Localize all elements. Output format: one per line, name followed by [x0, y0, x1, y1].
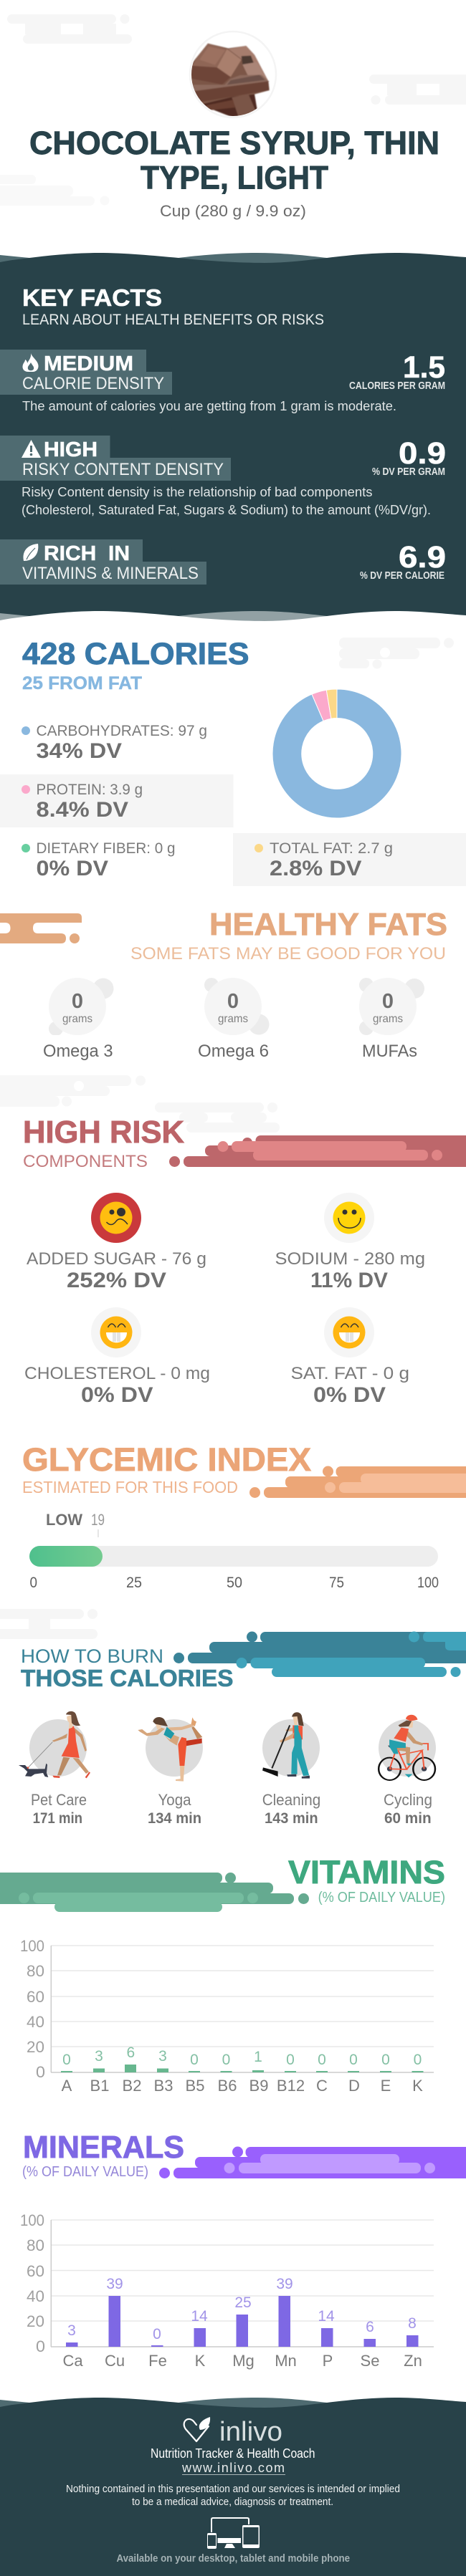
fact: risky content density — [0, 436, 446, 517]
legend: carbohydrates: 34% DV — [36, 739, 122, 763]
website link: www.inlivo.com — [181, 2461, 285, 2475]
activity: cycling: Cycling — [384, 1791, 432, 1809]
minerals heading — [22, 2130, 184, 2180]
gauge scale: 100 — [417, 1575, 439, 1591]
icon: woman sweeping — [262, 1712, 310, 1779]
legend: carbohydrates: CARBOHYDRATES: 97 g — [36, 723, 207, 739]
panel: vitamins — [0, 1854, 445, 2095]
panel: glycemic index — [22, 1441, 466, 1591]
panel: key facts — [0, 253, 466, 645]
bar chart: vitamins: B12 — [277, 2077, 305, 2095]
calories heading: 25 FROM FAT — [22, 673, 142, 693]
key facts heading — [22, 284, 324, 328]
legend: dietary fiber — [22, 840, 175, 880]
bar chart: vitamins: B9 — [249, 2077, 268, 2095]
icon: smiling face — [324, 1193, 374, 1243]
decorative band — [159, 2146, 466, 2178]
bar chart: vitamins: 0 — [381, 2052, 390, 2068]
risk: added sugar: 252% DV — [67, 1269, 166, 1292]
glycemic index heading — [22, 1441, 311, 1496]
high risk heading: HIGH RISK — [23, 1115, 184, 1150]
bar chart: minerals: Se — [361, 2352, 379, 2370]
high risk heading — [23, 1115, 184, 1171]
gauge scale — [30, 1575, 439, 1591]
panel: how to burn those calories — [0, 1609, 466, 1827]
legend: protein: PROTEIN: 3.9 g — [36, 782, 143, 798]
omega 3: Omega 3 — [43, 1042, 113, 1061]
fact: calorie density: MEDIUM — [44, 352, 133, 375]
healthy fats heading: HEALTHY FATS — [209, 907, 447, 942]
fact: risky content density: % DV PER GRAM — [372, 466, 445, 478]
risk: cholesterol: CHOLESTEROL - 0 mg — [24, 1364, 210, 1383]
legend: dietary fiber: 0% DV — [36, 857, 108, 880]
activity: yoga: 134 min — [148, 1810, 201, 1827]
bar chart: vitamins: 0 — [36, 2063, 45, 2081]
bar chart: vitamins: B2 — [123, 2077, 141, 2095]
bar chart: minerals: 25 — [234, 2294, 252, 2311]
panel: minerals — [20, 2130, 466, 2370]
bar chart: minerals: 6 — [366, 2319, 374, 2335]
activity: yoga: Yoga — [158, 1791, 191, 1809]
activity: pet care — [19, 1711, 90, 1827]
fact: risky content density: RISKY CONTENT DENSITY — [22, 460, 224, 479]
bar chart: vitamins: B6 — [218, 2077, 237, 2095]
bar chart: minerals: 14 — [318, 2308, 335, 2325]
bar chart: vitamins: 0 — [62, 2052, 71, 2068]
decorative band — [249, 1466, 466, 1498]
activity: cleaning: Cleaning — [262, 1791, 320, 1809]
fact: vitamins and minerals — [0, 539, 446, 585]
icon: leaf — [23, 544, 38, 561]
fact: risky content density: (Cholesterol, Saturated Fat, Sugars & Sodium) to the amount (%DV/gr). — [22, 503, 431, 517]
decorative band — [0, 1873, 309, 1912]
bar chart: vitamins: 40 — [27, 2013, 44, 2031]
bar chart: vitamins: D — [348, 2077, 360, 2095]
serving size: Cup (280 g / 9.9 oz) — [160, 202, 306, 220]
high risk heading: COMPONENTS — [23, 1152, 148, 1171]
donut chart — [272, 689, 401, 818]
gauge label: LOW — [46, 1511, 82, 1529]
bar chart: minerals: Cu — [105, 2352, 125, 2370]
bar chart: minerals: 0 — [153, 2326, 161, 2342]
bar chart: vitamins: 60 — [27, 1988, 44, 2006]
disclaimer: to be a medical advice, diagnosis or treatment. — [132, 2496, 333, 2508]
gauge scale: 50 — [227, 1575, 242, 1591]
panel: high risk — [0, 1075, 466, 1407]
calories heading: 428 CALORIES — [22, 637, 249, 671]
legend: dietary fiber: DIETARY FIBER: 0 g — [36, 840, 175, 857]
fact: calorie density — [0, 350, 445, 413]
vitamins heading: (% OF DAILY VALUE) — [318, 1890, 445, 1905]
bar chart: vitamins: C — [316, 2077, 328, 2095]
bar chart: minerals: 39 — [106, 2276, 123, 2292]
omega 3 — [43, 978, 113, 1061]
bar chart: vitamins: 6 — [127, 2044, 135, 2061]
disclaimer — [66, 2483, 400, 2508]
activity: cycling — [379, 1715, 436, 1827]
risk: added sugar — [27, 1193, 206, 1292]
legend: total fat: TOTAL FAT: 2.7 g — [270, 840, 393, 857]
gauge scale: 25 — [126, 1575, 142, 1591]
bar chart: vitamins: E — [381, 2077, 391, 2095]
food image: chocolate — [190, 32, 276, 120]
bar chart: minerals: Mn — [275, 2352, 297, 2370]
burn heading: HOW TO BURN — [21, 1645, 163, 1667]
fact: vitamins and minerals: 6.9 — [399, 540, 446, 575]
omega 3: 0 — [72, 990, 83, 1013]
fact: risky content density: Risky Content density is the relationship of bad components — [22, 485, 373, 499]
vitamins heading: VITAMINS — [288, 1854, 445, 1890]
risk: sodium: 11% DV — [310, 1269, 388, 1292]
bar chart: minerals: 14 — [191, 2308, 208, 2325]
risk: sodium — [275, 1193, 425, 1292]
bar chart: minerals: Ca — [62, 2352, 83, 2370]
activity: pet care: Pet Care — [31, 1791, 87, 1809]
activity: cycling: 60 min — [384, 1810, 432, 1827]
risk: cholesterol — [24, 1307, 210, 1407]
legend: total fat: 2.8% DV — [270, 857, 361, 880]
bar chart: minerals: 60 — [27, 2262, 44, 2280]
icon: grinning face — [324, 1307, 374, 1357]
risk: cholesterol: 0% DV — [81, 1383, 153, 1407]
legend: total fat — [255, 840, 393, 880]
bar chart: minerals: P — [323, 2352, 333, 2370]
decorative band — [0, 913, 82, 943]
bar chart: vitamins: 0 — [286, 2052, 295, 2068]
gauge scale: 0 — [30, 1575, 37, 1591]
mufas: grams — [373, 1013, 403, 1025]
fact: calorie density: CALORIE DENSITY — [22, 374, 164, 393]
minerals heading: MINERALS — [23, 2130, 184, 2165]
healthy fats heading — [130, 907, 447, 963]
legend: protein — [22, 782, 143, 822]
vitamins heading — [288, 1854, 445, 1905]
risk: saturated fat — [291, 1307, 409, 1407]
bar chart: vitamins: 0 — [349, 2052, 358, 2068]
bar chart: minerals: Zn — [404, 2352, 422, 2370]
bar chart: vitamins: K — [412, 2077, 423, 2095]
bar chart: minerals: 20 — [27, 2312, 44, 2330]
minerals heading: (% OF DAILY VALUE) — [22, 2164, 148, 2180]
bar chart: minerals: 40 — [27, 2287, 44, 2305]
key facts heading: LEARN ABOUT HEALTH BENEFITS OR RISKS — [22, 312, 324, 328]
fact: vitamins and minerals: VITAMINS & MINERALS — [22, 564, 199, 583]
omega 6: Omega 6 — [198, 1042, 269, 1061]
bar chart: vitamins: 20 — [27, 2038, 44, 2056]
bar chart: vitamins: 3 — [158, 2048, 167, 2065]
gauge label — [46, 1511, 105, 1537]
glycemic index heading: ESTIMATED FOR THIS FOOD — [22, 1478, 238, 1496]
activity: pet care: 171 min — [33, 1810, 82, 1827]
fact: vitamins and minerals: % DV PER CALORIE — [360, 570, 444, 582]
omega 3: grams — [62, 1013, 92, 1025]
bar chart: minerals: 80 — [27, 2236, 44, 2254]
fact: risky content density: HIGH — [44, 438, 98, 461]
fact: calorie density: The amount of calories you are getting from 1 gram is moderate. — [22, 399, 396, 413]
fact: calorie density: CALORIES PER GRAM — [349, 380, 445, 392]
omega 6 — [198, 978, 270, 1061]
mufas: 0 — [382, 990, 394, 1013]
bar chart: minerals: K — [195, 2352, 206, 2370]
title — [29, 125, 439, 196]
burn heading — [21, 1645, 234, 1691]
icon: woman cycling — [379, 1715, 435, 1780]
gray row backgrounds — [0, 774, 466, 886]
legend: carbohydrates — [22, 723, 207, 763]
bar chart: vitamins: B1 — [90, 2077, 109, 2095]
key facts heading: KEY FACTS — [22, 284, 162, 311]
activity: yoga — [138, 1717, 203, 1827]
panel: healthy fats — [0, 907, 447, 1061]
legend: protein: 8.4% DV — [36, 798, 128, 822]
logo: inlivo — [184, 2417, 282, 2447]
title: TYPE, LIGHT — [141, 159, 328, 196]
activity: cleaning: 143 min — [265, 1810, 318, 1827]
fact: vitamins and minerals: RICH IN — [44, 542, 130, 565]
fact: risky content density: 0.9 — [399, 436, 446, 471]
healthy fats heading: SOME FATS MAY BE GOOD FOR YOU — [130, 944, 446, 963]
activity: cleaning — [262, 1712, 320, 1827]
bar chart: vitamins: A — [62, 2077, 72, 2095]
disclaimer: Nothing contained in this presentation and our services is intended or implied — [66, 2483, 400, 2495]
header panel — [0, 14, 466, 220]
icon: woman in yoga pose — [138, 1717, 202, 1782]
mufas — [359, 978, 424, 1061]
bar chart: minerals — [20, 2211, 434, 2370]
bar chart: vitamins: 1 — [254, 2049, 262, 2065]
bar chart: minerals: Mg — [232, 2352, 255, 2370]
bar chart: vitamins: 0 — [222, 2052, 230, 2068]
icon: worried face — [91, 1193, 141, 1243]
bar chart: vitamins: 0 — [414, 2052, 422, 2068]
gauge bar — [29, 1546, 438, 1567]
icon: warning triangle — [22, 440, 41, 458]
tagline: Nutrition Tracker & Health Coach — [151, 2446, 315, 2461]
gauge scale: 75 — [329, 1575, 344, 1591]
bar chart: vitamins: B3 — [154, 2077, 173, 2095]
bar chart: minerals: 100 — [20, 2211, 44, 2229]
gauge label: 19 — [91, 1511, 105, 1529]
logo: inlivo: inlivo — [219, 2417, 282, 2447]
title: CHOCOLATE SYRUP, THIN — [29, 125, 439, 161]
bar chart: minerals: 39 — [276, 2276, 293, 2292]
omega 6: 0 — [227, 990, 239, 1013]
bar chart: vitamins: 0 — [190, 2052, 199, 2068]
decorative band — [173, 1632, 466, 1677]
glycemic index heading: GLYCEMIC INDEX — [22, 1441, 311, 1478]
availability note: Available on your desktop, tablet and mobile phone — [116, 2552, 350, 2565]
burn heading: THOSE CALORIES — [21, 1665, 234, 1691]
icon: grinning face — [91, 1307, 141, 1357]
risk: added sugar: ADDED SUGAR - 76 g — [27, 1249, 206, 1269]
bar chart: minerals: 8 — [408, 2315, 417, 2332]
bar chart: vitamins: B5 — [186, 2077, 204, 2095]
bar chart: minerals: Fe — [148, 2352, 167, 2370]
risk: saturated fat: SAT. FAT - 0 g — [291, 1364, 409, 1383]
fact: calorie density: 1.5 — [403, 350, 445, 385]
bar chart: minerals: 3 — [67, 2322, 76, 2339]
icon: devices — [207, 2518, 260, 2549]
bar chart: minerals: 0 — [36, 2337, 45, 2355]
panel: footer — [0, 2398, 466, 2576]
mufas: MUFAs — [362, 1042, 417, 1061]
calories heading — [22, 637, 249, 693]
bar chart: vitamins: 0 — [318, 2052, 326, 2068]
bar chart: vitamins: 80 — [27, 1962, 44, 1980]
risk: sodium: SODIUM - 280 mg — [275, 1249, 425, 1269]
bar chart: vitamins — [20, 1937, 434, 2095]
icon: flame — [22, 353, 39, 372]
panel: calories — [0, 637, 466, 886]
omega 6: grams — [218, 1013, 248, 1025]
bar chart: vitamins: 3 — [95, 2048, 103, 2065]
icon: woman walking dog — [19, 1711, 90, 1778]
decorative band — [169, 1135, 466, 1167]
risk: saturated fat: 0% DV — [313, 1383, 386, 1407]
bar chart: vitamins: 100 — [20, 1937, 44, 1955]
